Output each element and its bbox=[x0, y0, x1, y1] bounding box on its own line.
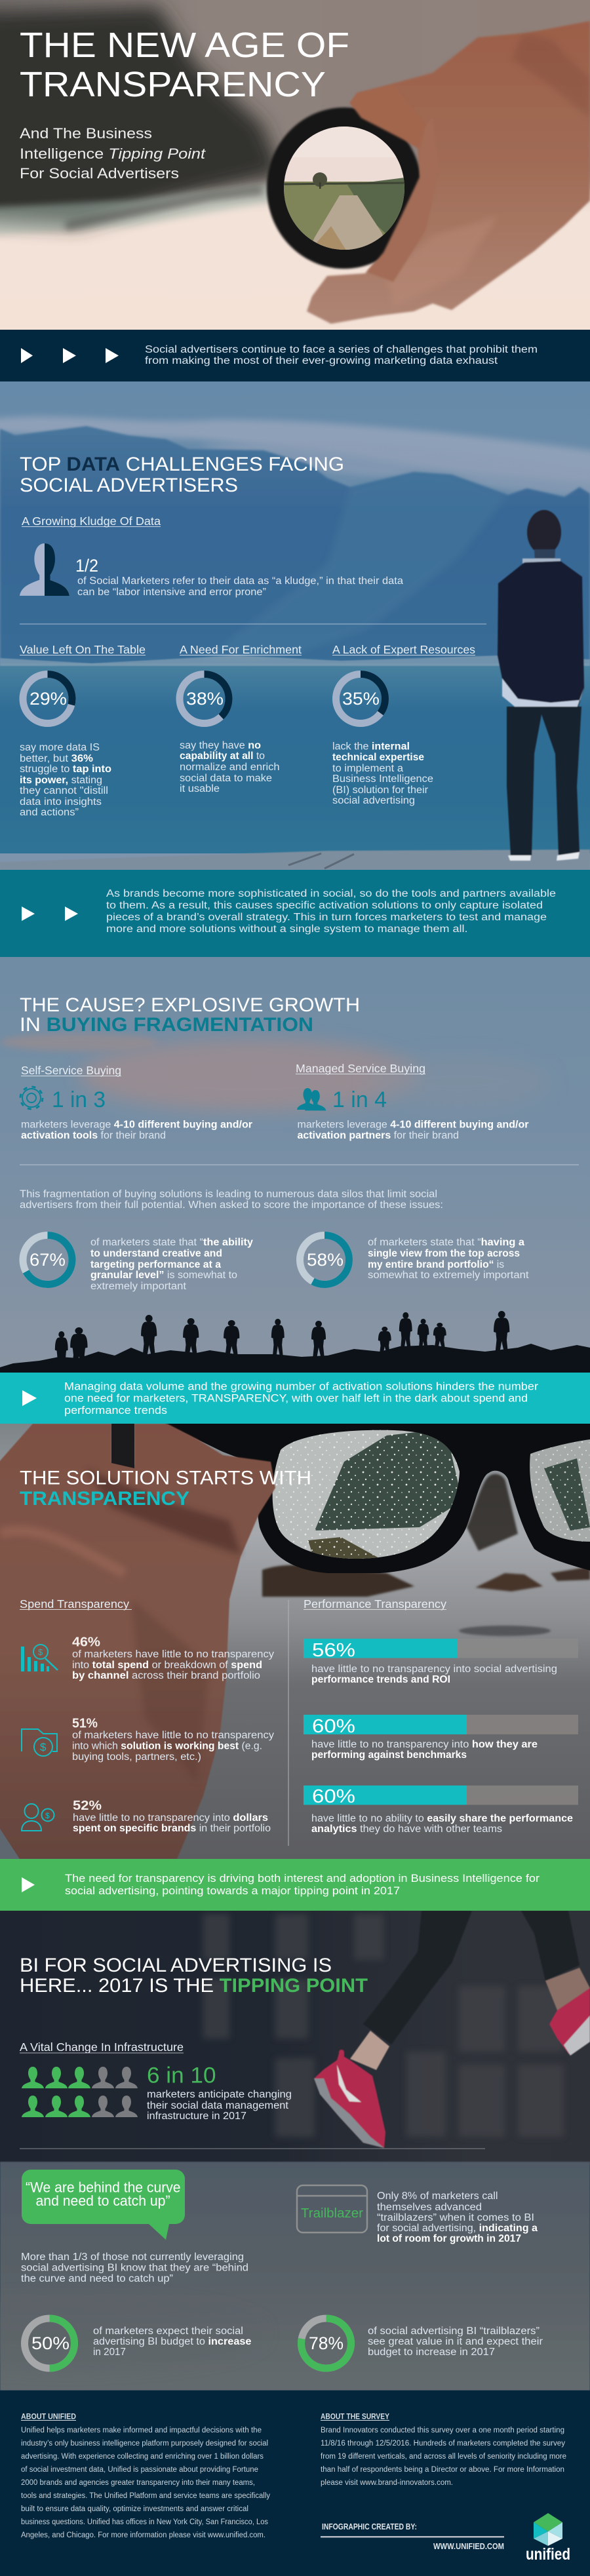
donut 35% bbox=[336, 674, 385, 724]
stat: 67%: of marketers state that “ the ability bbox=[90, 1237, 253, 1248]
about the survey: Brand Innovators conducted this survey over a one month period starting bbox=[321, 2427, 564, 2434]
arrow bbox=[22, 1877, 35, 1892]
stat: 46%: 46% bbox=[72, 1635, 100, 1649]
arrows: three triangles bbox=[21, 348, 119, 363]
bar: 56%: have little to no transparency into social advertising bbox=[311, 1664, 557, 1675]
stat: 52%: 52% bbox=[73, 1799, 102, 1813]
icon: trailblazer badge bbox=[297, 2185, 367, 2233]
runner legs bbox=[314, 1911, 590, 2148]
bar: 60% sharing: have little to no ability to easily share the performance bbox=[311, 1813, 573, 1824]
stat: one half: 1/2 bbox=[75, 556, 98, 576]
panel: hero bbox=[0, 0, 590, 330]
column: a need for enrichment: social data to make bbox=[180, 773, 272, 784]
stat: 50%: of marketers expect their social bbox=[93, 2326, 243, 2337]
stat: one half: can be “labor intensive and error prone” bbox=[77, 587, 266, 598]
about unified: of social investment data, Unified is passionate about providing Fortune bbox=[21, 2466, 258, 2474]
self-service buying: marketers leverage 4-10 different buying and/or bbox=[21, 1120, 252, 1130]
subtitle: And The Business bbox=[20, 125, 152, 142]
stat: 58%: somewhat to extremely important bbox=[368, 1270, 529, 1281]
about the survey: than half of respondents being a Director or above. For more Information bbox=[321, 2466, 564, 2474]
stat: 58% bbox=[300, 1235, 529, 1285]
icon: bars with magnifier bbox=[21, 1645, 58, 1671]
stat: 6 in 10: their social data management bbox=[147, 2100, 289, 2111]
title bbox=[20, 26, 349, 104]
fragmentation text: This fragmentation of buying solutions is leading to numerous data silos that limit social bbox=[20, 1189, 437, 1200]
about unified: industry’s only business intelligence platform purposely designed for social bbox=[21, 2440, 268, 2448]
mountain lake photo background bbox=[0, 381, 590, 870]
silhouettes on ridge bbox=[0, 1311, 590, 1373]
donut 78%: 78% bbox=[309, 2333, 344, 2353]
stat: 50%: advertising BI budget to increase bbox=[93, 2336, 252, 2347]
column: a need for enrichment: A Need For Enrichment bbox=[180, 643, 302, 656]
stat: 6 in 10: 6 in 10 bbox=[147, 2063, 216, 2088]
about unified: tools and strategies. The Unified Platform and service teams are specifically bbox=[21, 2492, 270, 2500]
column: a lack of expert resources: (BI) solution for their bbox=[332, 785, 428, 796]
infographic credit: WWW.UNIFIED.COM bbox=[433, 2542, 504, 2551]
stat: 51%: into which solution is working best (e.g. bbox=[72, 1741, 262, 1751]
footer bbox=[0, 2391, 590, 2576]
self-service buying: activation tools for their brand bbox=[21, 1130, 166, 1141]
band text bbox=[106, 888, 556, 935]
band text: Managing data volume and the growing number of activation solutions hinders the number bbox=[64, 1380, 539, 1392]
text: more than 1/3: social advertising BI know that they are “behind bbox=[21, 2263, 248, 2273]
heading: BI FOR SOCIAL ADVERTISING IS bbox=[20, 1955, 332, 1976]
icon: gear bbox=[20, 1087, 43, 1109]
self-service buying: Self-Service Buying bbox=[21, 1064, 121, 1077]
column: a lack of expert resources: social advertising bbox=[332, 795, 415, 806]
bar: 60% sharing: 60% bbox=[312, 1786, 355, 1807]
column: value left on the table: its power, stating bbox=[20, 775, 102, 786]
stat: 50% bbox=[25, 2318, 252, 2368]
donut 29%: 29% bbox=[30, 689, 67, 709]
column: a need for enrichment: say they have no bbox=[180, 740, 261, 751]
stat: 51%: 51% bbox=[72, 1716, 98, 1730]
text: trailblazers: themselves advanced bbox=[377, 2202, 482, 2213]
lens view of road bbox=[284, 127, 404, 250]
stat: 46%: of marketers have little to no transparency bbox=[72, 1649, 274, 1660]
about unified: business questions. Unified has offices in New York City, San Francisco, Los bbox=[21, 2518, 268, 2526]
intro text: Social advertisers continue to face a series of challenges that prohibit them bbox=[145, 344, 538, 355]
icon: trailblazer badge: Trailblazer bbox=[301, 2206, 363, 2221]
about unified: built to ensure data quality, optimize investments and answer critical bbox=[21, 2505, 248, 2513]
donut 50% bbox=[25, 2318, 75, 2368]
text: trailblazers: for social advertising, indicating a bbox=[377, 2223, 538, 2234]
heading: TRANSPARENCY bbox=[20, 1488, 189, 1510]
stat: 51% bbox=[22, 1716, 274, 1763]
about unified: Angeles, and Chicago. For more information please visit www.unified.com. bbox=[21, 2531, 266, 2539]
stat: 67%: to understand creative and bbox=[90, 1248, 222, 1259]
about unified: Unified helps marketers make informed and impactful decisions with the bbox=[21, 2427, 262, 2434]
column: value left on the table: data into insights bbox=[20, 796, 102, 808]
text: trailblazers: Only 8% of marketers call bbox=[377, 2191, 498, 2202]
arrows: two triangles bbox=[22, 907, 78, 921]
column: value left on the table: and actions” bbox=[20, 807, 79, 818]
heading bbox=[20, 1955, 368, 1997]
band text: performance trends bbox=[64, 1405, 167, 1416]
about unified: ABOUT UNIFIED bbox=[21, 2412, 76, 2421]
about the survey bbox=[321, 2412, 566, 2487]
bar: 56%: 56% bbox=[312, 1640, 355, 1661]
column: a lack of expert resources: lack the internal bbox=[332, 741, 410, 752]
stat: 50%: in 2017 bbox=[93, 2347, 126, 2358]
stat: 6 in 10 bbox=[147, 2063, 292, 2122]
column: a lack of expert resources: to implement a bbox=[332, 763, 403, 774]
stat: 78% bbox=[302, 2318, 543, 2368]
donut 67%: 67% bbox=[30, 1250, 66, 1270]
stat: one half: of Social Marketers refer to their data as “a kludge,” in that their data bbox=[77, 576, 403, 587]
column: a need for enrichment: capability at all to bbox=[180, 751, 265, 762]
text: trailblazers: lot of room for growth in 2017 bbox=[377, 2233, 521, 2244]
column: value left on the table: better, but 36% bbox=[20, 753, 93, 764]
arrow bbox=[22, 1390, 37, 1406]
column: value left on the table bbox=[20, 643, 146, 818]
infographic credit bbox=[321, 2522, 504, 2551]
donut 78% bbox=[302, 2318, 351, 2368]
hero photo background bbox=[0, 0, 590, 330]
stat: 67%: granular level” is somewhat to bbox=[90, 1270, 237, 1281]
title: THE NEW AGE OF bbox=[20, 26, 349, 65]
stat: 52%: have little to no transparency into dollars bbox=[73, 1812, 268, 1824]
column: a need for enrichment: normalize and enrich bbox=[180, 762, 279, 773]
subtitle bbox=[20, 125, 206, 182]
about unified: advertising. With experience collecting and enriching over 1 billion dollars bbox=[21, 2453, 264, 2461]
heading: TOP DATA CHALLENGES FACING bbox=[20, 454, 344, 475]
stat: 52%: spent on specific brands in their portfolio bbox=[73, 1823, 271, 1834]
subtitle: For Social Advertisers bbox=[20, 165, 179, 182]
bar: 60% benchmarks: have little to no transparency into how they are bbox=[311, 1739, 538, 1750]
stat: 78%: see great value in it and expect their bbox=[368, 2336, 543, 2347]
donut 67% bbox=[23, 1235, 72, 1285]
donut 50%: 50% bbox=[31, 2333, 69, 2353]
hand holding glasses bbox=[0, 1424, 275, 1859]
heading: THE SOLUTION STARTS WITH bbox=[20, 1467, 311, 1489]
column: value left on the table: they cannot "distill bbox=[20, 785, 108, 796]
stat: 52% bbox=[22, 1799, 271, 1834]
callout: speech bubble: and need to catch up” bbox=[35, 2193, 170, 2209]
column: performance transparency: Performance Transparency bbox=[304, 1597, 446, 1610]
text: more than 1/3: the curve and need to catch up” bbox=[21, 2273, 173, 2284]
stat: 67% bbox=[23, 1235, 253, 1292]
stat: 58%: single view from the top across bbox=[368, 1248, 520, 1259]
managed service buying: Managed Service Buying bbox=[296, 1062, 425, 1075]
stat: 46%: by channel across their brand portfolio bbox=[72, 1670, 260, 1681]
bar: 60% benchmarks: performing against benchmarks bbox=[311, 1749, 467, 1761]
donut 38%: 38% bbox=[186, 689, 224, 709]
heading bbox=[20, 1467, 311, 1510]
panel: BI tipping point bbox=[0, 1911, 590, 2391]
icon: 6 in 10 people grid bbox=[22, 2067, 138, 2117]
title: TRANSPARENCY bbox=[20, 65, 326, 104]
teal band bbox=[0, 870, 590, 957]
hand bbox=[307, 21, 590, 324]
heading: SOCIAL ADVERTISERS bbox=[20, 475, 238, 496]
icon: two people bbox=[297, 1088, 326, 1110]
camera lens ring bbox=[267, 107, 422, 269]
about unified bbox=[21, 2412, 270, 2539]
infographic credit: INFOGRAPHIC CREATED BY: bbox=[322, 2522, 417, 2531]
text: trailblazers: “trailblazers” when it comes to BI bbox=[377, 2212, 534, 2223]
self-service buying bbox=[20, 1064, 252, 1141]
column: a lack of expert resources: technical expertise bbox=[332, 752, 424, 763]
text: more than 1/3: More than 1/3 of those not currently leveraging bbox=[21, 2252, 244, 2263]
column: performance transparency bbox=[304, 1597, 578, 1835]
stat: one half bbox=[75, 556, 403, 598]
column: a need for enrichment bbox=[180, 643, 302, 794]
bar: 60% sharing bbox=[304, 1786, 578, 1835]
managed service buying: marketers leverage 4-10 different buying and/or bbox=[298, 1120, 529, 1130]
heading: IN BUYING FRAGMENTATION bbox=[20, 1014, 313, 1036]
right lens view bbox=[530, 1439, 590, 1542]
about the survey: from 19 different verticals, and across all levels of seniority including more bbox=[321, 2453, 566, 2461]
subtitle: Intelligence Tipping Point bbox=[20, 146, 206, 162]
glasses frame bbox=[165, 1424, 590, 1573]
bar: 60% sharing: analytics they do have with other teams bbox=[311, 1824, 502, 1835]
stat: 78%: of social advertising BI “trailblazers” bbox=[368, 2326, 540, 2337]
icon: person with dollar coin: $ bbox=[45, 1811, 50, 1820]
column: a lack of expert resources bbox=[332, 643, 475, 806]
stat: 51%: buying tools, partners, etc.) bbox=[72, 1751, 201, 1763]
stat: 51%: of marketers have little to no transparency bbox=[72, 1730, 274, 1741]
column: value left on the table: say more data IS bbox=[20, 742, 100, 753]
logo: unified bbox=[526, 2513, 570, 2564]
donut 35%: 35% bbox=[342, 689, 380, 709]
band text: As brands become more sophisticated in social, so do the tools and partners available bbox=[106, 888, 556, 899]
beach and glasses photo background bbox=[0, 1424, 590, 1859]
logo: unified: unified bbox=[526, 2545, 570, 2564]
column: spend transparency: Spend Transparency bbox=[20, 1597, 129, 1610]
donut 58%: 58% bbox=[307, 1250, 344, 1270]
stat: 67%: targeting performance at a bbox=[90, 1259, 221, 1270]
intro text bbox=[145, 344, 538, 366]
stat: 6 in 10: infrastructure in 2017 bbox=[147, 2111, 246, 2122]
about the survey: 11/8/16 through 12/5/2016. Hundreds of marketers completed the survey bbox=[321, 2440, 565, 2448]
cyan band bbox=[0, 1373, 590, 1424]
donut 58% bbox=[300, 1235, 349, 1285]
about the survey: ABOUT THE SURVEY bbox=[321, 2412, 389, 2421]
panel: the solution starts with transparency bbox=[0, 1424, 590, 1859]
column: a lack of expert resources: A Lack of Expert Resources bbox=[332, 643, 475, 656]
managed service buying: 1 in 4 bbox=[332, 1087, 387, 1112]
band text: pieces of a brand’s overall strategy. This in turn forces marketers to test and manage bbox=[106, 912, 547, 923]
column: value left on the table: Value Left On The Table bbox=[20, 643, 146, 656]
heading: HERE... 2017 IS THE TIPPING POINT bbox=[20, 1975, 368, 1997]
band text: to them. As a result, this causes specific activation solutions to only capture isolated bbox=[106, 900, 543, 911]
heading bbox=[20, 994, 360, 1036]
icon: half-filled person bbox=[20, 543, 69, 596]
bar: 56%: performance trends and ROI bbox=[311, 1674, 450, 1685]
band text: more and more solutions without a single system to manage them all. bbox=[106, 924, 468, 935]
callout: speech bubble: “We are behind the curve bbox=[26, 2179, 181, 2196]
column: a lack of expert resources: Business Intelligence bbox=[332, 773, 433, 785]
stat: 46% bbox=[21, 1635, 274, 1681]
icon: folder with dollar: $ bbox=[40, 1741, 47, 1753]
navy intro band bbox=[0, 330, 590, 381]
sunset sky background bbox=[0, 957, 590, 1373]
bar: 60% benchmarks bbox=[304, 1715, 578, 1761]
heading: THE CAUSE? EXPLOSIVE GROWTH bbox=[20, 994, 360, 1016]
stat: 58%: my entire brand portfolio“ is bbox=[368, 1259, 504, 1270]
heading bbox=[20, 454, 344, 496]
green band bbox=[0, 1859, 590, 1911]
fragmentation text: advertisers from their full potential. When asked to score the importance of these issues: bbox=[20, 1200, 443, 1211]
fragmentation text bbox=[20, 1189, 443, 1211]
bar: 56% bbox=[304, 1639, 578, 1685]
about unified: 2000 brands and agencies greater transparency into their many teams, bbox=[21, 2479, 255, 2487]
managed service buying bbox=[296, 1062, 529, 1141]
column: a need for enrichment: it usable bbox=[180, 783, 220, 794]
stat: 46%: into total spend or breakdown of spend bbox=[72, 1660, 262, 1671]
self-service buying: 1 in 3 bbox=[52, 1087, 106, 1112]
band text: The need for transparency is driving both interest and adoption in Business Intelligence for bbox=[65, 1873, 540, 1884]
panel: buying fragmentation bbox=[0, 957, 590, 1373]
stat: 67%: extremely important bbox=[90, 1281, 187, 1292]
bar: 60% benchmarks: 60% bbox=[312, 1716, 355, 1737]
about the survey: please visit www.brand-innovators.com. bbox=[321, 2479, 453, 2487]
text: more than 1/3 bbox=[21, 2252, 248, 2284]
stat: 78%: budget to increase in 2017 bbox=[368, 2347, 495, 2358]
managed service buying: activation partners for their brand bbox=[298, 1130, 459, 1141]
text: trailblazers bbox=[377, 2191, 538, 2244]
donut 29% bbox=[23, 674, 72, 724]
vital change sub-heading: A Vital Change In Infrastructure bbox=[20, 2040, 184, 2054]
stat: 58%: of marketers state that “ having a bbox=[368, 1237, 524, 1248]
intro text: from making the most of their ever-growing marketing data exhaust bbox=[145, 355, 498, 366]
running shoes photo background bbox=[0, 1911, 590, 2391]
left lens view bbox=[273, 1430, 460, 1559]
man standing bbox=[498, 510, 584, 861]
band text bbox=[65, 1873, 540, 1897]
panel: top data challenges bbox=[0, 381, 590, 870]
callout: speech bubble bbox=[22, 2170, 185, 2240]
icon: folder with dollar bbox=[22, 1729, 57, 1756]
band text bbox=[64, 1380, 539, 1416]
column: spend transparency bbox=[20, 1597, 274, 1834]
column: value left on the table: struggle to tap into bbox=[20, 764, 111, 775]
stat: 6 in 10: marketers anticipate changing bbox=[147, 2089, 292, 2100]
icon: person with dollar coin bbox=[22, 1804, 54, 1831]
band text: one need for marketers, TRANSPARENCY, with over half left in the dark about spend and bbox=[64, 1392, 528, 1404]
kludge sub-heading: A Growing Kludge Of Data bbox=[22, 515, 161, 528]
icon: bars with magnifier: $ bbox=[38, 1647, 43, 1657]
band text: social advertising, pointing towards a major tipping point in 2017 bbox=[65, 1885, 400, 1897]
donut 38% bbox=[180, 674, 229, 724]
